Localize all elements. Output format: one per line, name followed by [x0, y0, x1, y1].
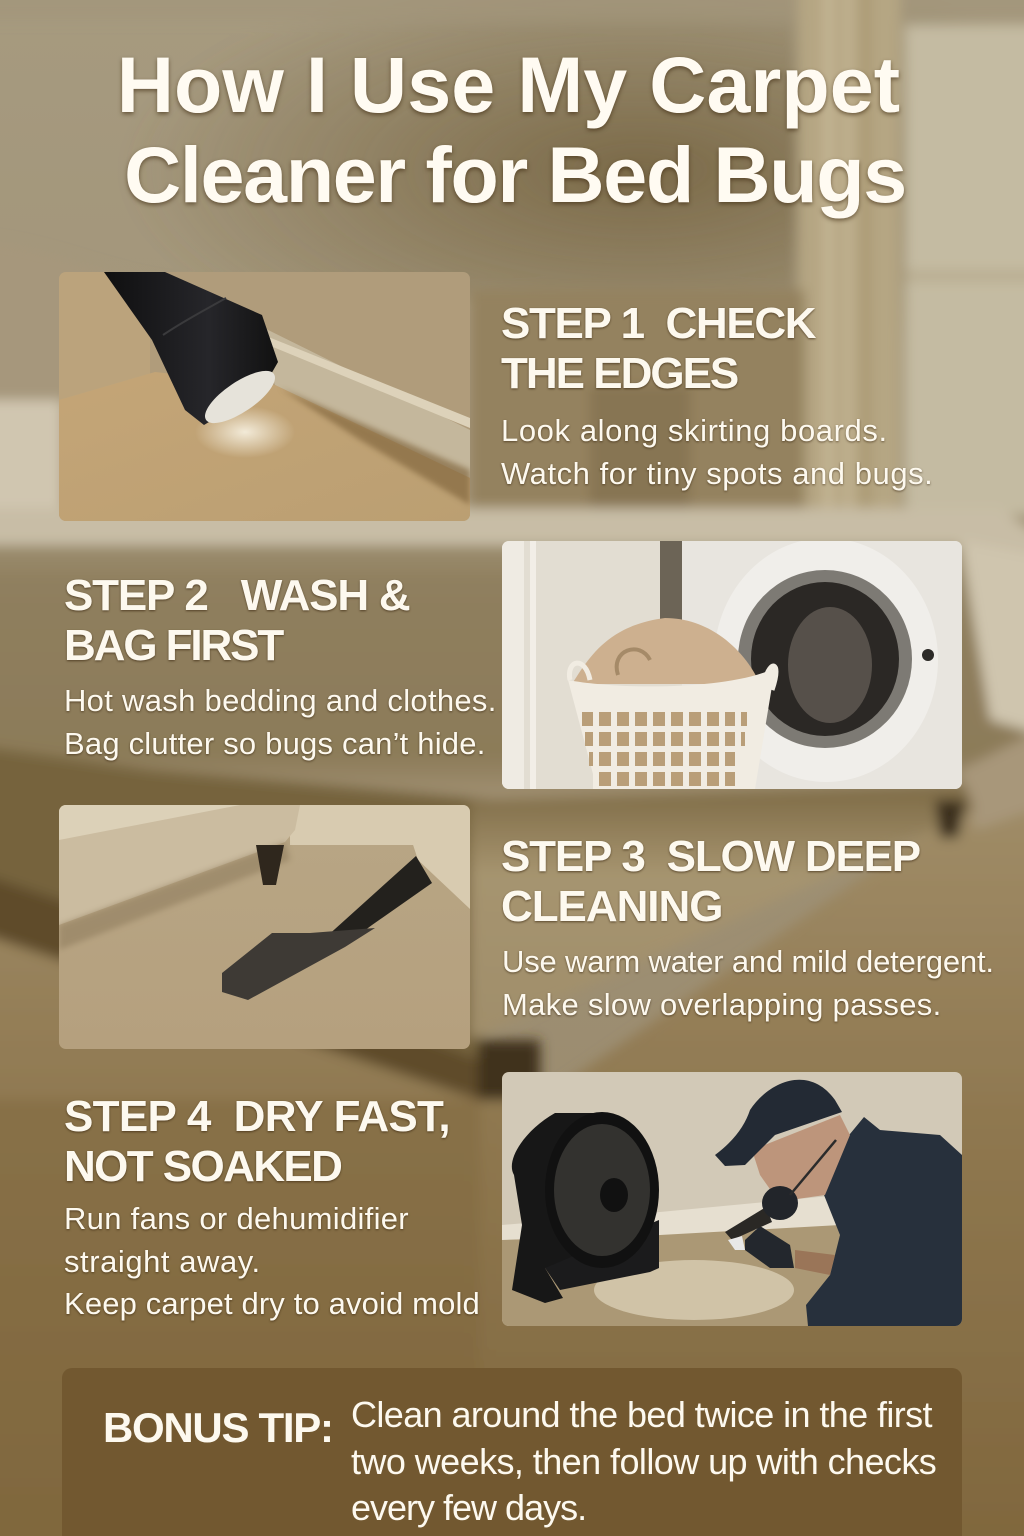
step 2 heading: STEP 2 WASH & [64, 571, 410, 620]
bonus tip panel [62, 1368, 962, 1536]
step 1 heading: STEP 1 CHECK [501, 299, 815, 348]
step 1 heading [500, 299, 816, 398]
photo: vacuum nozzle on carpet under bed [59, 805, 470, 1049]
step 4 text: straight away. [64, 1244, 261, 1278]
step 2 heading [64, 571, 410, 670]
step 1 text: Look along skirting boards. [501, 413, 888, 448]
bonus tip text: Clean around the bed twice in the first [351, 1394, 932, 1435]
step 1 text [500, 413, 933, 493]
photo: flashlight on carpet edge [59, 272, 470, 521]
step 2 heading: BAG FIRST [64, 621, 282, 670]
bonus tip text: two weeks, then follow up with checks [351, 1440, 936, 1482]
step 2 text [64, 683, 497, 762]
bonus tip label: BONUS TIP: [103, 1404, 333, 1451]
bonus tip text [351, 1394, 936, 1528]
photo: fan and technician inspecting carpet [502, 1072, 962, 1326]
step 2 text: Bag clutter so bugs can’t hide. [64, 726, 486, 760]
step 3 text: Use warm water and mild detergent. [502, 944, 994, 979]
step 3 heading: STEP 3 SLOW DEEP [501, 832, 920, 881]
step 1 text: Watch for tiny spots and bugs. [501, 456, 933, 490]
step 4 heading: STEP 4 DRY FAST, [64, 1092, 450, 1141]
bonus tip text: every few days. [351, 1487, 586, 1528]
step 3 heading: CLEANING [501, 882, 722, 931]
step 4 text: Run fans or dehumidifier [64, 1201, 409, 1236]
title: Cleaner for Bed Bugs [124, 130, 906, 219]
step 4 heading [64, 1092, 450, 1191]
step 1 heading: THE EDGES [501, 349, 737, 398]
step 3 text: Make slow overlapping passes. [502, 986, 941, 1022]
step 4 text: Keep carpet dry to avoid mold [64, 1286, 480, 1321]
title [117, 40, 906, 223]
title: How I Use My Carpet [117, 40, 900, 129]
step 2 text: Hot wash bedding and clothes. [64, 683, 497, 718]
step 3 text [502, 944, 994, 1024]
step 4 text [64, 1201, 480, 1322]
photo: laundry basket and washing machine [502, 541, 962, 789]
step 4 heading: NOT SOAKED [64, 1142, 341, 1191]
step 3 heading [501, 832, 921, 931]
